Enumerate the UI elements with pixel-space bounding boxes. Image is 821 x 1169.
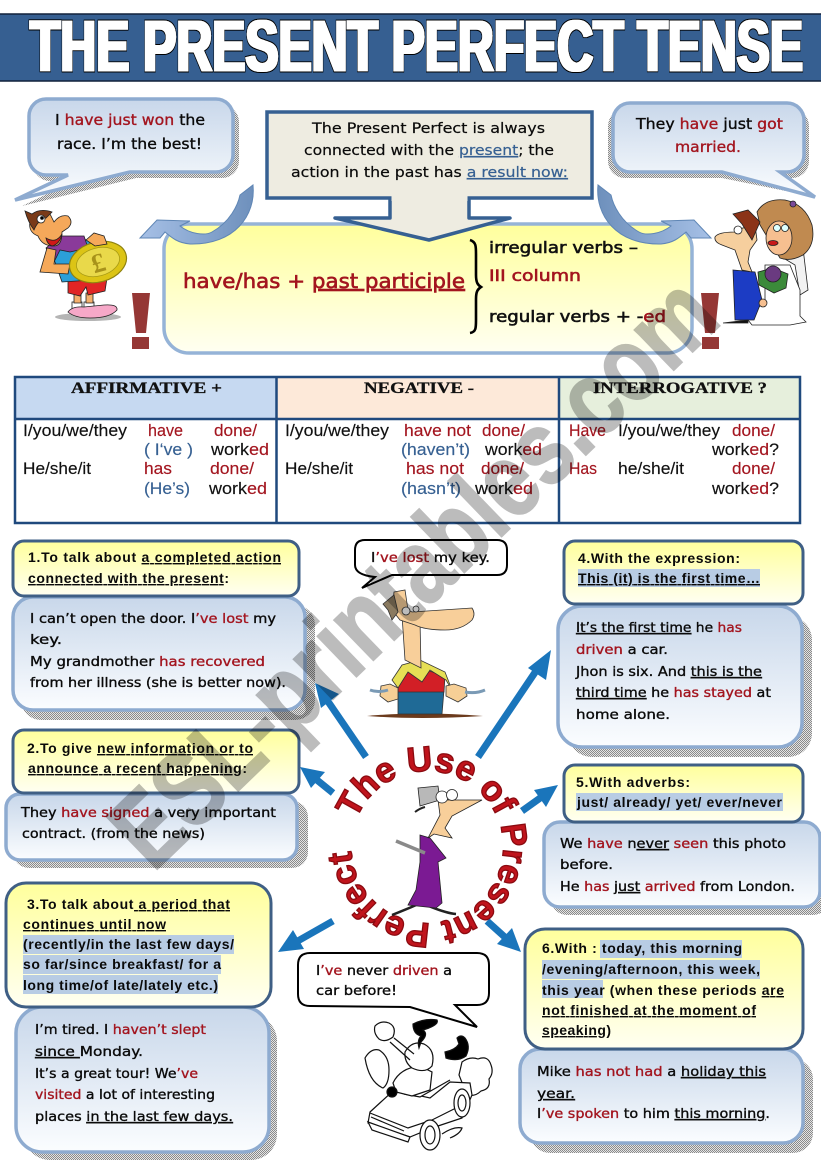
example text 6: year. <box>537 1086 575 1102</box>
table column: negative <box>285 380 542 498</box>
example text 2: contract. (from the news) <box>22 826 205 842</box>
icon: man with empty pockets <box>367 590 485 718</box>
table column: affirmative: worked <box>210 441 269 459</box>
example text 4: Jhon is six. And this is the <box>575 664 762 680</box>
example panel 2 <box>6 794 308 868</box>
example text 1: I can’t open the door. I ’ve lost my <box>30 611 276 627</box>
table column: affirmative: I/you/we/they <box>23 422 128 440</box>
rule text 3: so far/since breakfast/ for a <box>23 956 221 972</box>
table column: interrogative: worked? <box>711 441 779 459</box>
arrow to panel 1 <box>315 683 366 757</box>
speech bubble: I've lost my key <box>355 540 507 588</box>
definition text <box>291 121 568 181</box>
definition box with down arrow <box>267 112 592 240</box>
bubble text <box>316 963 452 999</box>
curved arrow right <box>598 185 711 244</box>
example panel 6 <box>520 1049 813 1153</box>
conjugation table <box>15 377 800 523</box>
table column: interrogative: done/ <box>732 460 775 478</box>
example text 3: It’s a great tour! We ’ve <box>35 1066 198 1082</box>
table column: negative: (hasn’t) <box>401 480 461 498</box>
example text 5 <box>560 836 795 895</box>
bubble text: married. <box>675 138 741 156</box>
rule text 5: just/ already/ yet/ ever/never <box>576 794 783 810</box>
rule text 6: speaking) <box>542 1022 611 1038</box>
verb rules <box>489 238 666 326</box>
table column: negative: (haven’t) <box>401 441 470 459</box>
speech bubble: I've never driven a car before <box>298 953 489 1027</box>
formula panel <box>164 224 692 353</box>
example text 6: Mike has not had a holiday this <box>537 1064 766 1080</box>
rule text 4: This (it) is the first time… <box>578 570 760 586</box>
table column: negative: done/ <box>482 422 525 440</box>
table column: interrogative: INTERROGATIVE ? <box>593 380 767 397</box>
exclamation mark left <box>132 293 150 349</box>
arrow to panel 5 <box>522 785 558 811</box>
rule panel 1 <box>13 541 299 596</box>
definition text: The Present Perfect is always <box>311 121 545 137</box>
example panel 3 <box>16 1007 277 1160</box>
rule text 2: 2.To give new information or to <box>27 740 253 756</box>
arrow to panel 3 <box>278 921 333 952</box>
rule text 1: 1.To talk about a completed action <box>28 549 281 565</box>
example panel 5 <box>544 822 821 915</box>
title banner <box>0 7 821 87</box>
icon: man with coin: £ <box>88 247 109 279</box>
verb rules: regular verbs + - ed <box>489 307 666 326</box>
definition text: action in the past has a result now: <box>291 165 568 181</box>
definition text: connected with the present ; the <box>304 143 554 159</box>
example text 3: since Monday. <box>35 1044 143 1060</box>
table column: negative: worked <box>484 441 542 459</box>
arrows <box>278 650 558 952</box>
rule text 6 <box>542 940 784 1038</box>
example text 3 <box>35 1022 233 1125</box>
bubble text: car before! <box>316 983 397 999</box>
rule text 2: announce a recent happening: <box>28 760 247 776</box>
table column: negative: has not <box>406 460 464 478</box>
icon: cartoon car <box>365 1020 492 1150</box>
example text 6 <box>537 1064 770 1122</box>
example text 4 <box>575 620 771 723</box>
table column: negative: worked <box>474 480 533 498</box>
example text 1 <box>30 611 286 691</box>
rule text 5: 5.With adverbs: <box>576 774 690 790</box>
formula: have/has + past participle <box>183 269 465 293</box>
example text 2: They have signed a very important <box>20 805 276 821</box>
example text 1: key. <box>30 632 62 648</box>
table column: interrogative: he/she/it <box>618 460 684 478</box>
arrow to panel 4 <box>478 650 551 757</box>
rule text 3: continues until now <box>23 916 166 932</box>
icon: bride and groom <box>715 200 813 325</box>
rule text 6: not finished at the moment of <box>542 1002 756 1018</box>
table column: negative: NEGATIVE - <box>364 380 474 397</box>
rule text 3: 3.To talk about a period that <box>27 896 230 912</box>
icon: old woman with stick <box>392 786 482 915</box>
example text 3: I’m tired. I haven’t slept <box>35 1022 206 1038</box>
bubble text <box>55 111 205 153</box>
rule text 5 <box>576 774 783 810</box>
example text 4: home alone. <box>576 707 670 723</box>
verb rules: irregular verbs – <box>489 238 638 257</box>
table column: affirmative: done/ <box>210 460 254 478</box>
rule text 2 <box>27 740 253 776</box>
table column: interrogative <box>569 380 779 498</box>
rule panel 4 <box>564 541 803 604</box>
table column: interrogative: I/you/we/they <box>618 422 721 440</box>
rule panel 3 <box>6 883 271 1007</box>
speech bubble: I have just won <box>15 99 239 206</box>
rule text 1: connected with the present: <box>28 570 229 586</box>
bubble text: I’ve lost my key. <box>371 550 490 566</box>
rule text 6: this year (when these periods are <box>542 982 784 998</box>
rule text 6: 6.With : today, this morning <box>542 940 742 956</box>
rule panel 6 <box>525 929 803 1049</box>
rule text 1 <box>28 549 281 586</box>
example text 1: from her illness (she is better now). <box>30 675 286 691</box>
example panel 4 <box>558 606 812 757</box>
example text 4: It’s the first time he has <box>576 620 742 636</box>
circular heading: The Use of Present Perfect <box>328 746 528 948</box>
table column: interrogative: Have <box>569 422 606 440</box>
example text 2 <box>20 805 276 842</box>
table column: interrogative: Has <box>569 460 597 478</box>
example panel 1 <box>13 597 315 720</box>
bubble text: I’ve never driven a <box>316 963 452 979</box>
example text 1: My grandmother has recovered <box>30 654 265 670</box>
bubble text: I have just won the <box>55 111 205 129</box>
table column: interrogative: done/ <box>732 422 775 440</box>
table column: affirmative: has <box>144 460 172 478</box>
rule text 3: (recently/in the last few days/ <box>23 936 234 952</box>
table column: affirmative: have <box>148 422 183 440</box>
table column: negative: have not <box>404 422 471 440</box>
arrow to panel 6 <box>487 921 521 952</box>
icon: man with coin <box>25 210 131 321</box>
brace <box>470 240 481 333</box>
table column: affirmative: worked <box>208 480 267 498</box>
curved arrow left <box>140 185 253 244</box>
example text 4: third time he has stayed at <box>576 685 771 701</box>
bubble text: race. I’m the best! <box>57 135 202 153</box>
rule text 3: long time/of late/lately etc.) <box>23 977 218 993</box>
table column: affirmative <box>23 380 269 498</box>
rule text 4: 4.With the expression: <box>578 550 740 566</box>
example text 5: We have never seen this photo <box>560 836 786 852</box>
example text 5: before. <box>560 857 613 873</box>
table column: affirmative: (He’s) <box>144 480 190 498</box>
table column: affirmative: AFFIRMATIVE + <box>71 380 222 397</box>
rule panel 2 <box>13 730 299 793</box>
table column: affirmative: ( I‘ve ) <box>144 441 193 459</box>
example text 4: driven a car. <box>576 642 668 658</box>
speech bubble: They have just got married <box>608 103 815 197</box>
example text 3: places in the last few days. <box>35 1109 233 1125</box>
bubble text <box>635 115 783 156</box>
table column: affirmative: done/ <box>214 422 257 440</box>
table column: negative: He/she/it <box>285 460 353 478</box>
table column: affirmative: He/she/it <box>23 460 91 478</box>
exclamation mark right <box>701 293 719 349</box>
arrow to panel 2 <box>300 767 333 793</box>
example text 3: visited a lot of interesting <box>35 1087 215 1103</box>
table column: interrogative: worked? <box>711 480 779 498</box>
verb rules: III column <box>489 266 581 285</box>
rule text 3 <box>23 896 234 993</box>
bubble text: They have just got <box>635 115 783 133</box>
rule text 4 <box>578 550 760 586</box>
rule text 6: /evening/afternoon, this week, <box>542 961 760 977</box>
rule panel 5 <box>564 765 803 822</box>
table column: negative: I/you/we/they <box>285 422 390 440</box>
example text 5: He has just arrived from London. <box>560 879 795 895</box>
table column: negative: done/ <box>481 460 524 478</box>
example text 6: I’ve spoken to him this morning . <box>537 1106 770 1122</box>
